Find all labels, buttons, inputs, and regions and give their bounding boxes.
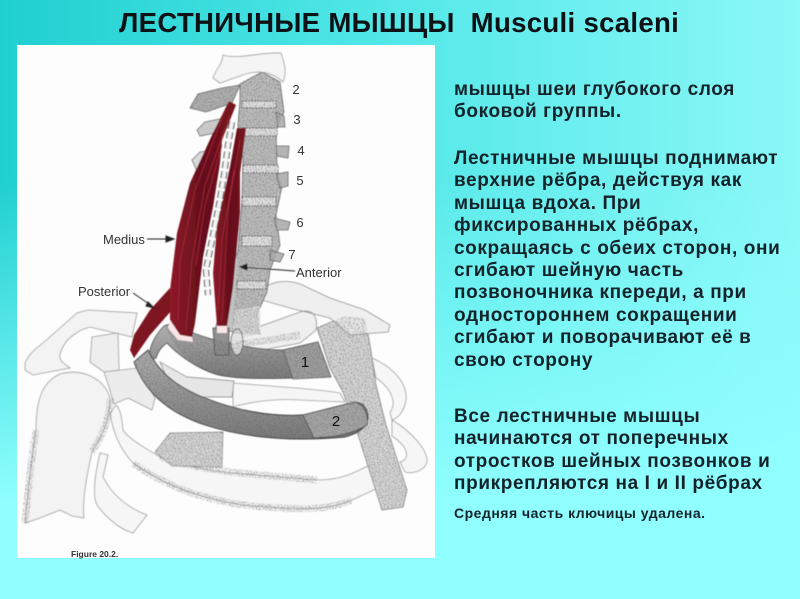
rib one [150,322,330,379]
figure labels: 3 [293,112,301,127]
thoracic vertebra between ribs [155,432,223,467]
muscle fibres [178,110,240,330]
action of the muscles text: фиксированных рёбрах, [454,215,699,236]
origin and insertion text: Все лестничные мышцы [454,406,700,427]
figure labels: 6 [296,215,304,230]
intervertebral discs [237,101,278,289]
action of the muscles text: сгибают и поворачивают её в [454,327,751,348]
rib one end segment [283,342,331,379]
action of the muscles text: сгибают шейную часть [454,260,684,281]
origin and insertion text [454,406,770,494]
figure labels: Medius [103,232,145,247]
lower ribs [94,358,427,533]
origin and insertion text: отростков шейных позвонков и [454,451,770,472]
action of the muscles text: сокращаясь с обеих сторон, они [454,238,780,259]
rib two [134,350,368,439]
figure labels: 7 [288,247,296,262]
action of the muscles text: одностороннем сокращении [454,305,737,326]
origin and insertion text: прикрепляются на I и II рёбрах [454,473,763,494]
action of the muscles text: свою сторону [454,350,593,371]
scalenus anterior muscle [213,128,246,326]
white figure background [17,45,435,558]
sternum [317,316,407,510]
cervical vertebrae column [190,53,290,340]
rib two end segment [303,402,368,438]
right clavicle [236,282,390,352]
leader lines [133,236,295,308]
figure labels: Figure 20.2. [71,549,118,559]
muscle tendon ends [168,320,227,342]
stipple shading [25,72,407,523]
figure labels [71,82,342,559]
action of the muscles text: позвоночника кпереди, а при [454,282,747,303]
origin and insertion text: начинаются от поперечных [454,428,729,449]
transverse processes behind muscles [206,122,232,295]
figure labels: 2 [332,413,340,430]
figure labels: Posterior [78,284,131,299]
vessel stump [213,328,229,355]
figure labels: 5 [296,173,304,188]
intro text [454,79,735,122]
figure labels: 4 [297,143,305,158]
intro text: мышцы шеи глубокого слоя [454,79,735,100]
figure note: Средняя часть ключицы удалена. [454,505,706,521]
action of the muscles text: верхние рёбра, действуя как [454,170,742,191]
action of the muscles text: Лестничные мышцы поднимают [454,148,778,169]
figure labels: 2 [292,82,300,97]
figure labels: Anterior [296,265,342,280]
scalenus posterior muscle [130,288,172,358]
action of the muscles text: мышца вдоха. При [454,193,641,214]
action of the muscles text [454,148,780,371]
scalenus medius muscle [170,101,236,337]
title: ЛЕСТНИЧНЫЕ МЫШЦЫ Musculi scaleni [119,7,679,38]
figure labels: 1 [301,354,309,371]
upper thoracic vertebra and disc [160,362,234,397]
shoulder bones: clavicle, scapula and humerus [25,310,155,523]
intro text: боковой группы. [454,101,622,122]
